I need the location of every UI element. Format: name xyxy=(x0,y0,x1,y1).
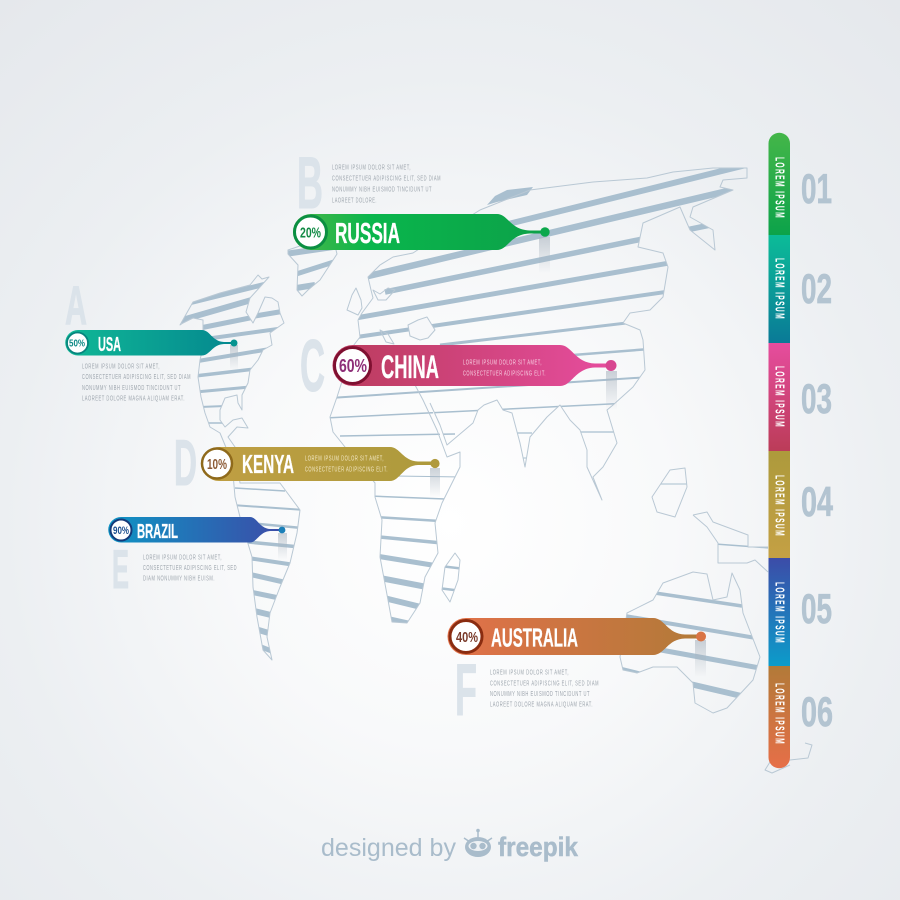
letter A: A xyxy=(65,274,87,336)
footer logo xyxy=(321,829,579,862)
text block: Russia: NONUMMY NIBH EUISMOD TINCIDUNT UT xyxy=(332,186,432,194)
world map xyxy=(175,164,812,773)
footer logo: designed by xyxy=(321,834,456,862)
callout: China: CONSECTETUER ADIPISCING ELIT. xyxy=(463,370,546,378)
text: C xyxy=(300,326,325,407)
text block: Brazil: LOREM IPSUM DOLOR SIT AMET, xyxy=(143,554,222,562)
callout: China xyxy=(332,345,617,410)
callout: Kenya: 10% xyxy=(207,456,227,473)
map stripes xyxy=(175,164,770,698)
segment 03: LOREM IPSUM xyxy=(772,366,786,428)
footer logo: freepik xyxy=(498,832,579,862)
callout: Kenya: CONSECTETUER ADIPISCING ELIT. xyxy=(305,466,388,474)
number 02: 02 xyxy=(801,265,832,312)
segment 01: LOREM IPSUM xyxy=(772,157,786,219)
callout: Russia: 20% xyxy=(300,224,321,242)
text block: Russia: CONSECTETUER ADIPISCING ELIT, SED DIAM xyxy=(332,176,441,182)
callout: USA: 50% xyxy=(69,338,86,350)
text block: Russia xyxy=(332,164,441,204)
text block: Brazil xyxy=(143,554,237,582)
segment 06 xyxy=(768,666,790,768)
callout: Australia: 40% xyxy=(456,629,478,646)
text: E xyxy=(112,538,129,600)
text: B xyxy=(297,143,323,224)
segment 01 xyxy=(768,133,790,235)
text block: Australia: LOREM IPSUM DOLOR SIT AMET, xyxy=(490,670,569,676)
text block: Australia: LAOREET DOLORE MAGNA ALIQUAM ERAT. xyxy=(490,702,593,708)
callout: Brazil: 90% xyxy=(113,525,129,537)
callout: China: 60% xyxy=(339,356,367,376)
text block: USA: LAOREET DOLORE MAGNA ALIQUAM ERAT. xyxy=(82,396,185,402)
callout: Brazil: BRAZIL xyxy=(137,521,178,543)
segment 05 xyxy=(768,558,790,666)
callout: Australia: AUSTRALIA xyxy=(491,624,578,652)
arctic island xyxy=(487,187,533,205)
text: D xyxy=(174,426,197,499)
text block: Australia: NONUMMY NIBH EUISMOD TINCIDUNT UT xyxy=(490,691,590,698)
text block: USA xyxy=(82,364,191,402)
text: F xyxy=(455,650,477,731)
callout: Kenya: LOREM IPSUM DOLOR SIT AMET, xyxy=(305,456,384,462)
text block: Russia: LOREM IPSUM DOLOR SIT AMET, xyxy=(332,164,411,172)
callout: USA: USA xyxy=(98,334,121,356)
text block: Brazil: DIAM NONUMMY NIBH EUISM. xyxy=(143,576,215,582)
segment 05: LOREM IPSUM xyxy=(772,582,786,644)
number 01: 01 xyxy=(801,165,832,212)
callout: China: CHINA xyxy=(381,349,439,385)
callout: Australia xyxy=(448,618,706,677)
continents outline xyxy=(180,168,812,773)
text block: Russia: LAOREET DOLORE. xyxy=(332,198,377,204)
segment 04: LOREM IPSUM xyxy=(772,475,786,537)
segment 02 xyxy=(768,235,790,343)
text block: USA: CONSECTETUER ADIPISCING ELIT, SED DIAM xyxy=(82,374,191,381)
number 04: 04 xyxy=(801,478,833,525)
segment 04 xyxy=(768,451,790,558)
callout: Kenya xyxy=(202,447,440,498)
segment 03 xyxy=(768,343,790,451)
text block: USA: NONUMMY NIBH EUISMOD TINCIDUNT UT xyxy=(82,385,181,392)
number 05: 05 xyxy=(801,585,832,632)
sidebar index xyxy=(768,133,790,768)
number 06: 06 xyxy=(801,688,833,735)
callout: Brazil xyxy=(108,517,287,560)
segment 02: LOREM IPSUM xyxy=(772,258,786,320)
icon: freepik mascot xyxy=(464,829,492,857)
callout: USA xyxy=(65,330,238,370)
number 03: 03 xyxy=(801,375,832,422)
callout: China: LOREM IPSUM DOLOR SIT AMET, xyxy=(463,360,542,366)
callout: Russia xyxy=(293,214,550,273)
callout: Russia: RUSSIA xyxy=(335,218,400,250)
callout: Kenya: KENYA xyxy=(242,449,294,479)
text block: Australia xyxy=(490,670,599,708)
segment 06: LOREM IPSUM xyxy=(772,683,786,745)
text block: Australia: CONSECTETUER ADIPISCING ELIT, SED DIAM xyxy=(490,680,599,688)
text block: USA: LOREM IPSUM DOLOR SIT AMET, xyxy=(82,364,160,370)
text block: Brazil: CONSECTETUER ADIPISCING ELIT, SED xyxy=(143,565,237,572)
